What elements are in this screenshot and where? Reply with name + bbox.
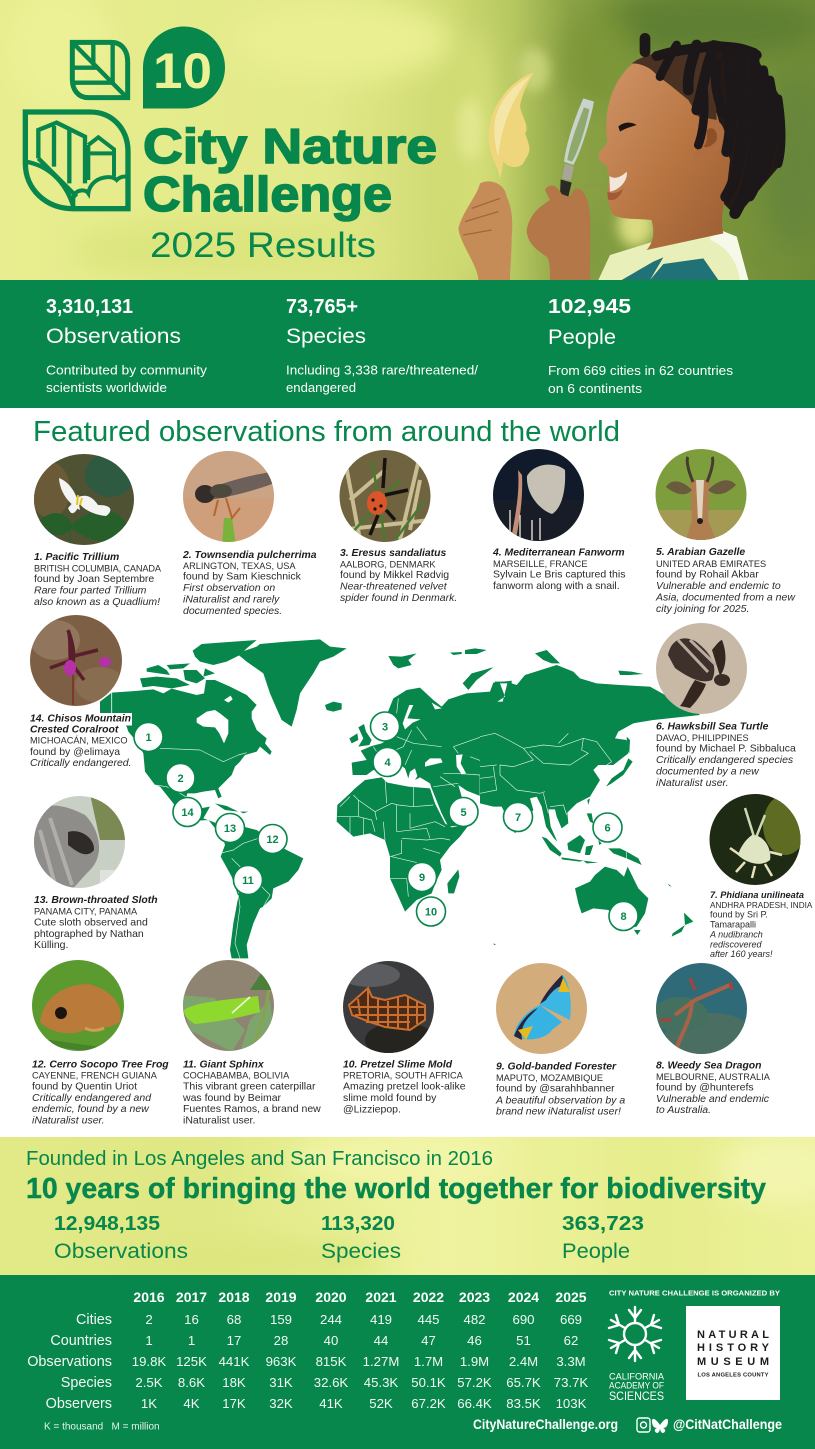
title: City Nature Challenge [143,120,437,222]
caption 14 backing [28,725,126,769]
marker 11: 11 [242,875,254,887]
California Academy of Sciences wordmark [609,1372,664,1403]
caption 8: Vulnerable and endemic [656,1093,770,1105]
caption 12: 12. Cerro Socopo Tree Frog [32,1060,169,1070]
Natural History Museum logo: NATURAL [697,1329,769,1341]
marker 3: 3 [382,722,388,734]
world map [100,639,700,958]
caption 14: found by @elimaya [30,746,120,758]
caption 6: iNaturalist user. [656,777,729,789]
photo 3: Eresus sandaliatus [338,448,434,544]
Natural History Museum logo: HISTORY [697,1342,770,1354]
table: yearly stats: 62 [564,1333,578,1348]
caption 12: found by Quentin Uriot [32,1080,137,1092]
table: yearly stats: Countries [50,1333,112,1349]
table: yearly stats: 66.4K [457,1396,492,1411]
table: yearly stats: 41K [319,1396,343,1411]
marker 5 [449,798,478,826]
table: yearly stats: 83.5K [506,1396,541,1411]
California Academy of Sciences wordmark: ACADEMY OF [609,1380,664,1390]
photo 4: Mediterranean Fanworm [493,449,584,541]
photo 9: Gold-banded Forester [496,963,587,1054]
hair braids [645,38,781,213]
caption 14: Crested Coralroot [30,724,119,736]
stat: species: 73,765+ [286,295,358,318]
caption 7: A nudibranch [709,930,763,940]
marker 9: 9 [419,872,425,884]
table: yearly stats: 19.8K [132,1354,166,1369]
scalp [632,47,717,120]
social handle: @CitNatChallenge [673,1417,782,1432]
table: yearly stats: 159 [270,1312,292,1327]
table: yearly stats [27,1289,588,1412]
caption 7: rediscovered [710,940,763,950]
caption 5: Asia, documented from a new [655,592,796,604]
California Academy of Sciences wordmark: SCIENCES [609,1389,664,1403]
table: yearly stats: 441K [219,1354,250,1369]
table: yearly stats: 1K [141,1396,157,1411]
table: yearly stats: Cities [76,1312,112,1328]
caption 4: 4. Mediterranean Fanworm [492,548,625,558]
stat: observations: Observations [46,324,181,348]
panel: 2025 stats band [0,280,815,408]
table: yearly stats: Species [61,1375,112,1391]
stat: species [286,295,478,395]
caption 5: found by Rohail Akbar [656,568,759,580]
stat: people: on 6 continents [548,381,642,396]
table: yearly stats: 1 [188,1333,195,1348]
table: yearly stats: 32.6K [314,1375,348,1390]
table: yearly stats: 52K [369,1396,393,1411]
table: yearly stats: 445 [417,1312,440,1327]
caption 7: after 160 years! [710,949,773,959]
table: yearly stats: 244 [320,1312,342,1327]
stat: people [548,295,733,396]
marker 2: 2 [177,773,184,785]
caption 4: MARSEILLE, FRANCE [493,559,587,569]
photo: child with magnifying glass [458,38,782,280]
marker 14: 14 [181,807,194,819]
photo 14: Chisos Mountain Crested Coralroot [30,615,122,706]
table: yearly stats: 65.7K [506,1375,541,1390]
organizer heading: CITY NATURE CHALLENGE IS ORGANIZED BY [609,1290,780,1298]
table: yearly stats: 2022 [413,1289,444,1305]
table: yearly stats: 16 [184,1312,199,1327]
table: yearly stats: 2019 [265,1289,297,1305]
caption 12: endemic, found by a new [32,1103,150,1115]
icon: leaf logo [72,42,128,98]
caption 4: Sylvain Le Bris captured this [493,568,625,580]
caption 2: ARLINGTON, TEXAS, USA [183,561,296,571]
text: founded line: Founded in Los Angeles and San Francisco in 2016 [26,1148,493,1170]
caption 12: Critically endangered and [32,1092,152,1104]
caption 13: PANAMA CITY, PANAMA [34,906,138,916]
stat: total observations: 12,948,135 [54,1212,160,1235]
stat: species: Species [286,324,366,348]
caption 4: fanworm along with a snail. [493,580,620,592]
caption 14: MICHOACÁN, MEXICO [30,736,128,746]
marker 2 [166,764,195,792]
caption 3: found by Mikkel Rødvig [340,569,449,581]
table legend: K = thousand M = million [44,1422,160,1432]
caption 2: First observation on [183,582,275,594]
map: Asia and Oceania [480,650,700,945]
caption 6: DAVAO, PHILIPPINES [656,733,749,743]
Natural History Museum logo: LOS ANGELES COUNTY [698,1372,769,1378]
heading: featured observations: Featured observations from around the world [33,416,620,448]
caption 9: MAPUTO, MOZAMBIQUE [496,1073,603,1083]
caption 5: city joining for 2025. [656,603,749,615]
caption 13: phtographed by Nathan [34,928,144,940]
caption 11: was found by Beimar [182,1092,282,1104]
caption 6: 6. Hawksbill Sea Turtle [656,722,769,732]
caption 1: BRITISH COLUMBIA, CANADA [34,564,162,574]
caption 6: Critically endangered species [656,754,794,766]
caption 12: CAYENNE, FRENCH GUIANA [32,1070,158,1080]
marker 7: 7 [515,812,521,824]
magnifying glass [560,98,594,197]
caption 7: Tamarapalli [710,920,756,930]
left hand holding leaf [458,181,512,280]
stat: total people: People [562,1239,630,1263]
marker 1: 1 [145,732,152,744]
table: yearly stats: 2016 [133,1289,165,1305]
marker 8 [609,902,638,930]
table: yearly stats: 40 [324,1333,338,1348]
stat: observations [46,295,207,395]
caption 11: iNaturalist user. [183,1114,255,1126]
caption 10: 10. Pretzel Slime Mold [343,1060,453,1070]
marker 1 [134,722,163,752]
caption 9: found by @sarahhbanner [496,1082,615,1094]
eye [618,123,637,132]
marker 13 [216,814,244,842]
photo 6: Hawksbill Sea Turtle [656,623,747,714]
table: yearly stats: 28 [274,1333,288,1348]
photo 1: Pacific Trillium [34,454,134,545]
marker 8: 8 [620,911,627,923]
marker 11 [234,866,262,894]
table: yearly stats: 3.3M [556,1354,586,1369]
table: yearly stats: 2023 [459,1289,490,1305]
table: yearly stats: 419 [370,1312,392,1327]
marker 13: 13 [224,823,236,835]
table: yearly stats: 45.3K [364,1375,398,1390]
table: yearly stats: 2 [145,1312,153,1327]
table: yearly stats: 57.2K [457,1375,492,1390]
subtitle: 2025 Results: 2025 Results [150,226,376,265]
marker 4: 4 [384,757,391,769]
table: yearly stats: 67.2K [411,1396,446,1411]
title: City Nature Challenge: City Nature [143,120,437,174]
caption 10: @Lizziepop. [343,1104,401,1116]
table: yearly stats: 125K [176,1354,207,1369]
stat: total species: 113,320 [321,1212,395,1235]
stat: species: Including 3,338 rare/threatened/ [286,362,478,378]
caption 1: Rare four parted Trillium [34,584,147,596]
table: yearly stats: 2021 [365,1289,397,1305]
table: yearly stats: 4K [183,1396,200,1411]
stat: total observations [54,1212,188,1263]
caption 10: PRETORIA, SOUTH AFRICA [343,1070,464,1080]
table: yearly stats: 103K [556,1396,587,1411]
leaf [489,72,533,180]
marker 4 [373,748,402,776]
table: yearly stats: 17 [227,1333,241,1348]
photo 5: Arabian Gazelle [656,449,746,540]
stat: people: People [548,325,616,349]
caption 7: found by Sri P. [710,910,768,920]
map: Europe, Africa and western Asia [337,648,512,912]
caption 9: brand new iNaturalist user! [496,1106,621,1118]
photo 7: Phidiana unilineata [710,794,800,885]
title: City Nature Challenge: Challenge [143,168,392,222]
heading: ten years: 10 years of bringing the world together for biodiversity [26,1173,766,1205]
table: yearly stats: 50.1K [411,1375,446,1390]
stat: total people: 363,723 [562,1212,644,1235]
stat: observations: 3,310,131 [46,295,133,318]
table: yearly stats: 2020 [315,1289,347,1305]
icon: city logo [25,112,128,209]
right hand holding magnifier [527,186,590,280]
table: yearly stats: 963K [266,1354,297,1369]
marker 12 [258,824,287,854]
caption 7: ANDHRA PRADESH, INDIA [710,901,813,910]
Natural History Museum logo [686,1306,780,1400]
photo 11: Giant Sphinx [183,960,274,1051]
table: yearly stats: 2.4M [509,1354,538,1369]
stat: species: endangered [286,380,356,395]
Natural History Museum logo: MUSEUM [697,1356,769,1368]
caption 2: found by Sam Kieschnick [183,570,302,582]
stat: people: 102,945 [548,295,631,318]
marker 7 [504,802,532,832]
icon: California Academy snowflake [609,1307,661,1361]
marker 6: 6 [604,822,611,834]
table: yearly stats: 815K [316,1354,347,1369]
caption 11: 11. Giant Sphinx [183,1060,265,1070]
caption 6: found by Michael P. Sibbaluca [656,742,796,754]
table: yearly stats: 2018 [218,1289,250,1305]
marker 9 [408,862,436,892]
table: yearly stats: 47 [421,1333,436,1348]
caption 11: Fuentes Ramos, a brand new [183,1103,321,1115]
header panel [0,0,815,285]
smile [609,172,627,192]
marker 14 [173,798,202,826]
caption 2: documented species. [183,605,282,617]
table: yearly stats: 18K [222,1375,246,1390]
caption 8: to Australia. [656,1104,711,1116]
caption 3: AALBORG, DENMARK [340,560,436,570]
icon: ten years badge: 10 [153,43,212,99]
stat: observations: Contributed by community [46,362,207,378]
header photo background [0,0,815,285]
caption 11: COCHABAMBA, BOLIVIA [183,1070,290,1080]
caption 14: 14. Chisos Mountain [30,714,131,724]
caption 2: iNaturalist and rarely [183,594,280,606]
caption 13: Külling. [34,939,68,951]
caption 6: documented by a new [656,766,760,778]
table: yearly stats: 2.5K [135,1375,163,1390]
table: yearly stats: 44 [374,1333,388,1348]
caption 10: Amazing pretzel look-alike [343,1080,466,1092]
photo 2: Townsendia pulcherrima [183,451,274,542]
photo 14 connector line [111,692,113,713]
table: yearly stats: 690 [512,1312,535,1327]
caption 8: MELBOURNE, AUSTRALIA [656,1072,771,1082]
table: yearly stats: 8.6K [178,1375,205,1390]
table: yearly stats: Observers [46,1396,112,1412]
stat: total species: Species [321,1239,401,1263]
table: yearly stats: 68 [227,1312,241,1327]
marker 5: 5 [460,807,467,819]
caption 7: 7. Phidiana unilineata [710,890,804,900]
table: yearly stats: 1.9M [460,1354,489,1369]
table: yearly stats: 2017 [176,1289,207,1305]
stat: people: From 669 cities in 62 countries [548,363,733,378]
website: CityNatureChallenge.org [473,1417,618,1432]
caption 1: also known as a Quadlium! [34,596,160,608]
shirt [598,227,748,280]
marker 3 [370,712,400,741]
marker 12: 12 [266,834,279,846]
photo 13: Brown-throated Sloth [34,796,125,888]
table: yearly stats: 51 [516,1333,531,1348]
caption 14 background [28,713,132,726]
caption 5: Vulnerable and endemic to [656,580,781,592]
stat: observations: scientists worldwide [46,380,167,395]
caption 1: 1. Pacific Trillium [34,552,119,563]
photo 10: Pretzel Slime Mold [343,961,434,1053]
icon: bluesky butterfly [652,1419,668,1433]
table: yearly stats: 1.27M [363,1354,399,1369]
table: yearly stats: Observations [27,1354,112,1370]
caption 2: 2. Townsendia pulcherrima [182,550,317,561]
marker 10 [416,897,446,926]
stat: total species [321,1212,401,1263]
table: yearly stats: 17K [222,1396,246,1411]
caption 1: found by Joan Septembre [34,573,154,585]
caption 14: Critically endangered. [30,757,132,769]
panel: footer [0,1275,815,1449]
stat: total observations: Observations [54,1239,188,1263]
table: yearly stats: 2024 [508,1289,539,1305]
caption 12: iNaturalist user. [32,1114,105,1126]
table: yearly stats: 1.7M [414,1354,443,1369]
caption 8: found by @hunterefs [656,1082,754,1094]
table: yearly stats: 482 [463,1312,486,1327]
hair mass [706,40,779,210]
head, face and neck [598,53,730,250]
photo 12: Cerro Socopo Tree Frog [32,960,124,1051]
photo 8: Weedy Sea Dragon [656,963,747,1054]
caption 13: 13. Brown-throated Sloth [34,895,158,906]
table: yearly stats: 73.7K [554,1375,588,1390]
icon: ten years badge [143,26,225,108]
table: yearly stats: 2025 [555,1289,587,1305]
map: Americas and Greenland [100,639,347,958]
caption 3: spider found in Denmark. [340,592,457,604]
map markers [134,712,638,930]
caption 11: This vibrant green caterpillar [183,1080,316,1092]
table: yearly stats: 31K [269,1375,293,1390]
caption 5: 5. Arabian Gazelle [656,547,745,558]
caption 8: 8. Weedy Sea Dragon [656,1060,761,1072]
table: yearly stats: 46 [467,1333,482,1348]
caption 3: 3. Eresus sandaliatus [340,548,446,559]
icon: instagram [637,1418,650,1432]
ear [712,119,724,138]
panel: ten years band [0,1135,815,1280]
California Academy of Sciences wordmark: CALIFORNIA [609,1372,664,1382]
table: yearly stats: 32K [269,1396,293,1411]
marker 6 [593,813,622,842]
caption 3: Near-threatened velvet [340,580,448,592]
caption 9: A beautiful observation by a [495,1094,625,1106]
caption 13: Cute sloth observed and [34,916,148,928]
caption 10: slime mold found by [343,1092,437,1104]
table: yearly stats: 669 [560,1312,582,1327]
stat: total people [562,1212,644,1263]
caption 5: UNITED ARAB EMIRATES [656,559,766,569]
table: yearly stats: 1 [145,1333,153,1348]
caption 9: 9. Gold-banded Forester [496,1062,617,1072]
marker 10: 10 [425,906,437,918]
